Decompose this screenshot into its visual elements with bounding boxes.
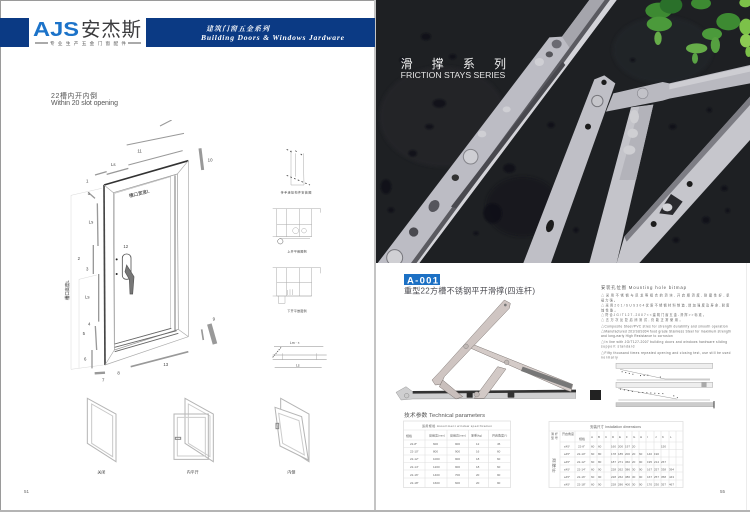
table: hardware specification: 60 (497, 457, 501, 461)
table: installation dimensions: 167 (647, 468, 652, 472)
labels: 9 (213, 317, 216, 322)
table: hardware specification: 60 (497, 465, 501, 469)
stay dimension: Ls (296, 363, 300, 367)
table: hardware specification: 22-16" (410, 473, 419, 477)
spec text: and long-early High Resistance to corrosion (601, 334, 673, 338)
table: installation dimensions: 386 (625, 468, 630, 472)
small clip of hardware near diagrams (590, 390, 601, 400)
handle (116, 244, 134, 294)
table: hardware specification: 900 (455, 465, 460, 469)
door exploded diagram (64, 120, 218, 383)
table: installation dimensions: 30 (632, 475, 636, 479)
stay dimension: Lm · × (290, 341, 300, 345)
labels: 槽口高度L (64, 280, 71, 300)
table: installation dimensions: E (619, 435, 621, 439)
table: hardware specification: 20 (476, 481, 480, 485)
table: installation dimensions: 160 (611, 444, 616, 448)
table: installation dimensions: 140 (647, 452, 652, 456)
heading: 安装孔位图 Mounting hole bitmap (601, 284, 687, 291)
handle: 12 (123, 244, 129, 249)
table: installation dimensions: 197 (625, 444, 630, 448)
closed window: 关闭 (97, 468, 105, 474)
table: installation dimensions: 358 (661, 475, 666, 479)
stay: arm (606, 65, 750, 112)
table: installation dimensions: J (655, 435, 657, 439)
table: installation dimensions: A (591, 435, 593, 439)
labels: 槽口宽度L (128, 188, 151, 200)
photo title (401, 56, 506, 80)
table: hardware specification: 窗扇高(mm) (450, 432, 466, 438)
page number left: 51 (24, 489, 30, 494)
table: installation dimensions: 357 (661, 482, 666, 486)
table: installation dimensions: 杆 (552, 467, 556, 473)
product badge: A-001 (407, 276, 439, 286)
table: installation dimensions: 257 (654, 468, 659, 472)
table: hardware specification: 600 (455, 481, 460, 485)
table: installation dimensions: G (633, 435, 636, 439)
lower section (273, 268, 321, 313)
logo: AJS (33, 18, 79, 41)
stay: right track (617, 97, 750, 263)
side-open window: 内平开 (187, 468, 199, 474)
lower section: 下开平嵌图例 (287, 308, 307, 313)
table: installation dimensions: 30 (632, 482, 636, 486)
table: installation dimensions: 257 (654, 475, 659, 479)
technical parameters heading: 技术参数 Technical parameters (404, 411, 485, 419)
spec text: △符合JG/T127-2007<<建筑门窗五金-滑撑>>标准。 (601, 312, 706, 317)
spec text: △采用不锈钢与尼龙等组合的滑块,开启顺滑度,耐磨性好,承 (601, 293, 730, 298)
stay: slim arm (589, 105, 653, 263)
table: installation dimensions: 60 (591, 460, 595, 464)
closed window (87, 398, 116, 474)
labels: 5 (88, 191, 91, 196)
table: installation dimensions: 22-8" (578, 444, 585, 448)
table: installation dimensions: 262 (618, 468, 623, 472)
table: hardware specification: 45 (497, 442, 501, 446)
table: installation dimensions: 90 (639, 482, 643, 486)
labels (64, 149, 216, 383)
table: installation dimensions: 170 (647, 482, 652, 486)
table: installation dimensions: 22-16" (577, 475, 586, 479)
table: hardware specification: 18 (476, 465, 480, 469)
header title: Building Doors & Windows Jardware (200, 33, 345, 42)
spec text: △采用201/SUS304优质不锈钢材料制造,增加强度及寿命,耐腐 (601, 302, 729, 307)
spec text: 蚀性能。 (601, 307, 618, 312)
table: hardware specification: 900 (455, 450, 460, 454)
subheading (51, 91, 118, 107)
table: installation dimensions: B (598, 435, 600, 439)
table: installation dimensions: 22-14" (577, 468, 586, 472)
labels: 3 (86, 267, 89, 272)
photo title: 滑撑系列 (401, 56, 506, 71)
table: installation dimensions: C (605, 435, 608, 439)
table: installation dimensions: 滑 杆 (551, 431, 558, 436)
product photo (376, 0, 750, 263)
table: installation dimensions: 20 (632, 452, 636, 456)
corner and section diagrams (272, 149, 327, 368)
table: installation dimensions: 394 (669, 468, 674, 472)
table: installation dimensions: 167 (647, 475, 652, 479)
table: hardware specification: 90 (497, 473, 501, 477)
table: installation dimensions: ≤45° (564, 452, 571, 456)
table: hardware specification: 60 (497, 450, 501, 454)
spec text: support standard (601, 345, 635, 349)
table: installation dimensions: I (647, 435, 648, 439)
table: hardware specification: 开启角度(°) (492, 432, 507, 438)
leaves (645, 0, 750, 64)
table: hardware specification: 1200 (433, 465, 440, 469)
labels: 8 (117, 371, 120, 376)
table: installation dimensions: 200 (625, 452, 630, 456)
table: installation dimensions: 60 (591, 468, 595, 472)
table: installation dimensions: ≤45° (564, 444, 571, 448)
table: installation dimensions: 60 (591, 452, 595, 456)
table: installation dimensions: 80 (598, 452, 602, 456)
table: installation dimensions: 271 (618, 460, 623, 464)
table: installation dimensions: 262 (618, 475, 623, 479)
table: hardware specification: 90 (497, 481, 501, 485)
table: hardware specification: 1400 (433, 473, 440, 477)
table: installation dimensions: 195 (647, 460, 652, 464)
table: hardware specification: 900 (455, 457, 460, 461)
table: installation dimensions: 20 (632, 460, 636, 464)
table: installation dimensions: ≤45° (564, 482, 571, 486)
table: installation dimensions: 338 (661, 468, 666, 472)
table: installation dimensions: 开启角度 (562, 431, 574, 436)
spec text: 载力强。 (601, 298, 617, 303)
labels: 1 (86, 178, 89, 183)
table: installation dimensions: 228 (611, 482, 616, 486)
labels: 4 (88, 321, 91, 326)
table: installation dimensions: 60 (591, 444, 595, 448)
product photo: friction stay (396, 300, 576, 400)
side-open window (174, 398, 213, 474)
table: installation dimensions: 22-12" (577, 460, 586, 464)
table: hardware specification: 800 (433, 450, 438, 454)
table: installation dimensions: 60 (598, 444, 602, 448)
table: installation dimensions: K (662, 435, 664, 439)
table: hardware specification: 22-18" (410, 481, 419, 485)
table: installation dimensions: 178 (611, 452, 616, 456)
table: installation dimensions: 467 (669, 482, 674, 486)
table: hardware specification: 12 (476, 442, 480, 446)
labels: 7 (102, 378, 105, 383)
logo: 专业生产五金门窗配件 (50, 40, 126, 47)
table: installation dimensions: 型 号 (551, 435, 558, 440)
table: installation dimensions: 150 (661, 444, 666, 448)
spec text: △Fifty thousand times repeated opening and closing test, use still be used (601, 350, 731, 355)
table: installation dimensions: 228 (611, 475, 616, 479)
table: hardware specification: 900 (455, 442, 460, 446)
logo: 安杰斯 (81, 19, 141, 41)
table: hardware specification: 20 (476, 473, 480, 477)
labels: 2 (78, 256, 81, 261)
table: hardware specification: 700 (455, 473, 460, 477)
table: installation dimensions: 187 (611, 460, 616, 464)
product title: 重型22方槽不锈钢平开滑撑(四连杆) (404, 286, 535, 296)
table: installation dimensions: L (670, 435, 672, 439)
table: installation dimensions: 200 (618, 444, 623, 448)
table: installation dimensions: ≤45° (564, 468, 571, 472)
table: installation dimensions: H (640, 435, 642, 439)
table: installation dimensions: ≤45° (564, 460, 571, 464)
table: installation dimensions: 214 (654, 460, 659, 464)
table: installation dimensions: 90 (598, 475, 602, 479)
header title: 建筑门窗五金系列 (206, 25, 271, 33)
labels: 13 (163, 362, 169, 367)
table: installation dimensions: 286 (618, 482, 623, 486)
table: hardware specification: 承重(kg) (471, 432, 482, 438)
table: installation dimensions: 400 (625, 482, 630, 486)
table: installation dimensions: 190 (654, 452, 659, 456)
table: installation dimensions: 267 (661, 460, 666, 464)
labels: Ls (85, 295, 90, 300)
header band (0, 18, 375, 47)
table: installation dimensions: 230 (654, 482, 659, 486)
tilt window: 内倒 (287, 468, 295, 474)
table: hardware specification (404, 421, 510, 488)
mounting hole info (601, 284, 731, 408)
table: installation dimensions: 规格 (579, 436, 585, 441)
hole diagrams (616, 363, 714, 408)
stay dimension (273, 341, 327, 367)
door frame (104, 161, 188, 365)
table: installation dimensions: 60 (591, 475, 595, 479)
table: installation dimensions: 185 (618, 452, 623, 456)
stay: centre plate (523, 75, 615, 263)
dimension lines (71, 182, 187, 369)
table: hardware specification: 规格 (406, 433, 412, 438)
table: installation dimensions: 60 (639, 452, 643, 456)
table: installation dimensions: 360 (625, 460, 630, 464)
subheading: Within 20 slot opening (51, 100, 118, 107)
table: installation dimensions: 撑 (552, 462, 556, 468)
table: installation dimensions: D (612, 435, 615, 439)
upper section (273, 209, 321, 254)
table: hardware specification: 22-12" (410, 457, 419, 461)
labels: Ls (111, 162, 116, 167)
table: hardware specification: 窗扇宽(mm) (429, 432, 445, 438)
stay: long track (378, 0, 617, 266)
table: installation dimensions: 386 (625, 475, 630, 479)
logo (33, 18, 141, 47)
spec text: △Manufactured 201/SUS304 food grade Stainless Steel for maximum strength (601, 328, 731, 333)
table: hardware specification: 18 (476, 457, 480, 461)
table: installation dimensions: 60 (591, 482, 595, 486)
table: installation dimensions (549, 422, 683, 488)
subheading: 22槽内开内倒 (51, 91, 97, 100)
corner detail: 传手连接构件安装图 (281, 190, 311, 195)
table: hardware specification: 22-14" (410, 465, 419, 469)
table: installation dimensions: ≤45° (564, 475, 571, 479)
table: installation dimensions: 90 (598, 482, 602, 486)
spec text: △In line with JG/T127-2007 building doors and windows hardware sliding (601, 339, 727, 344)
table: hardware specification: 适用规格 Assortment window specification (422, 423, 492, 428)
upper section: 上开平嵌图例 (287, 249, 307, 254)
labels: 10 (208, 157, 213, 162)
table: hardware specification: 16 (476, 450, 480, 454)
table: installation dimensions: 22-10" (577, 452, 586, 456)
spec text (601, 293, 731, 359)
table: installation dimensions: 90 (639, 460, 643, 464)
labels: Ls (89, 219, 93, 224)
corner detail (281, 149, 311, 195)
labels: 5 (83, 331, 86, 336)
table: installation dimensions: 滑 (552, 457, 556, 463)
table: installation dimensions: 80 (598, 460, 602, 464)
table: installation dimensions: 90 (598, 468, 602, 472)
table: hardware specification: 1600 (433, 481, 440, 485)
photo title: FRICTION STAYS SERIES (401, 70, 506, 80)
table: installation dimensions: 90 (639, 468, 643, 472)
spec text: △Composite Steel/PVC stres for strength durability and smooth operation (601, 324, 728, 329)
table: installation dimensions: 90 (639, 475, 643, 479)
tilt window (275, 398, 309, 474)
table: hardware specification: 22-10" (410, 450, 419, 454)
hardware strips (89, 120, 215, 373)
table: hardware specification: 22-8" (410, 442, 417, 446)
table: hardware specification: 600 (433, 442, 438, 446)
labels: 11 (137, 149, 142, 154)
spec text: △五万次反复启闭测试,仍能正常使用。 (601, 317, 683, 322)
table: installation dimensions: 安装尺寸 Installation dimensions (590, 424, 641, 429)
window opening thumbnails (86, 398, 310, 474)
table: installation dimensions: 228 (611, 468, 616, 472)
spec text: normally (601, 355, 618, 359)
table: installation dimensions: F (626, 435, 628, 439)
labels: 6 (84, 357, 87, 362)
header title (200, 25, 345, 42)
table: hardware specification: 1000 (433, 457, 440, 461)
table: installation dimensions: 443 (669, 475, 674, 479)
table: installation dimensions: 20 (632, 444, 636, 448)
table: installation dimensions: 30 (632, 468, 636, 472)
table: installation dimensions: 22-18" (577, 482, 586, 486)
page number right: 55 (720, 489, 726, 494)
